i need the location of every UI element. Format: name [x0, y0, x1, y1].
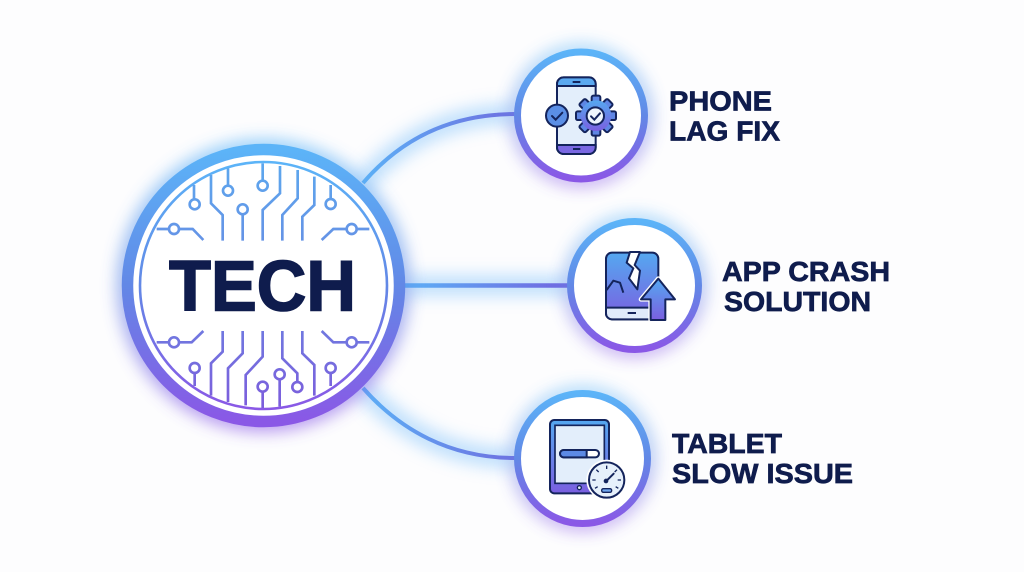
- circuit traces: [157, 163, 369, 408]
- label: phone lag fix: LAG FIX: [669, 116, 780, 146]
- connector: top branch: [363, 114, 515, 183]
- node: phone lag fix: [517, 52, 645, 180]
- label: app crash solution: APP CRASH: [722, 256, 890, 287]
- hub title: TECH: [169, 248, 356, 326]
- label: phone lag fix: PHONE: [669, 86, 772, 116]
- node: app crash solution: [570, 222, 698, 350]
- central hub: TECH circuit circle: [126, 148, 400, 422]
- label: tablet slow issue: SLOW ISSUE: [672, 458, 853, 489]
- label: app crash solution: SOLUTION: [724, 286, 871, 317]
- icon: cracked device with up arrow: [606, 252, 675, 320]
- node: tablet slow issue: [518, 394, 648, 524]
- icon: tablet with progress bar and gauge: [550, 420, 625, 498]
- label: tablet slow issue: [672, 428, 853, 489]
- connector: middle branch: [405, 278, 568, 294]
- label: tablet slow issue: TABLET: [672, 428, 782, 459]
- label: app crash solution: [722, 256, 890, 317]
- label: phone lag fix: [669, 86, 780, 146]
- icon: phone with gear and check: [546, 77, 616, 154]
- connector: bottom branch: [363, 388, 515, 458]
